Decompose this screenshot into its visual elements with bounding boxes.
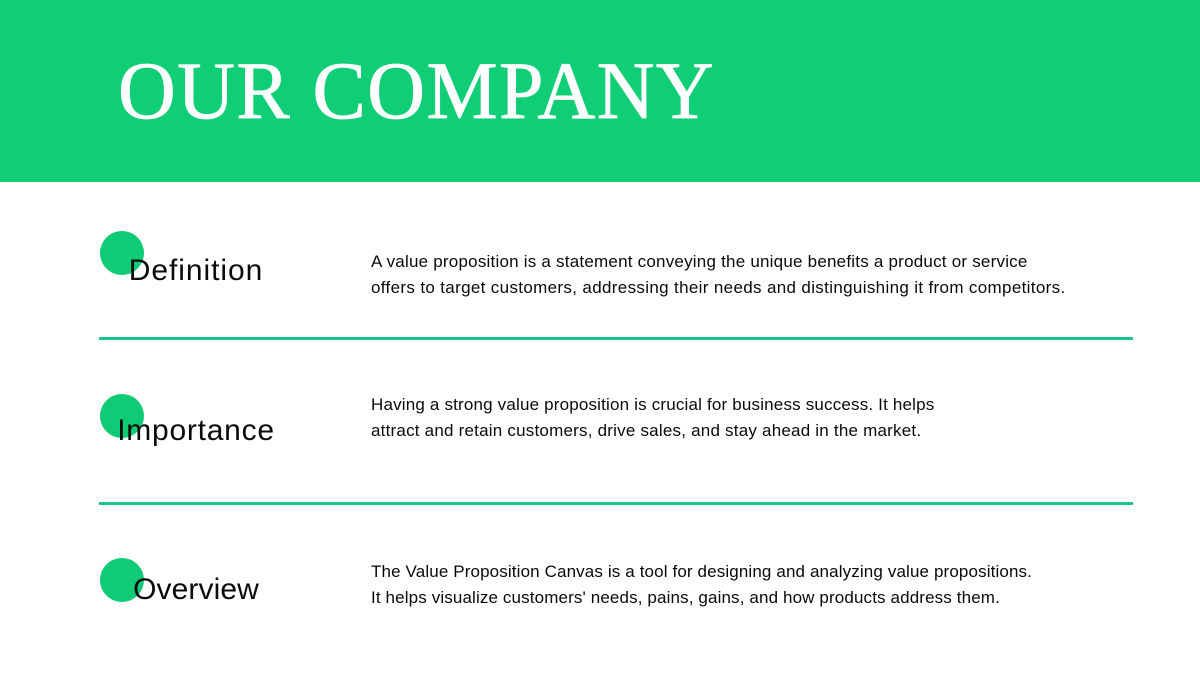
- icon: importance dot: [100, 394, 144, 438]
- text block: definition: A value proposition is a statement conveying the unique benefits a product or service: [371, 252, 1028, 271]
- title: OUR COMPANY: [118, 47, 715, 136]
- text block: definition: [371, 252, 1066, 297]
- text block: overview: It helps visualize customers' needs, pains, gains, and how products address them.: [371, 588, 1000, 607]
- text block: importance: [371, 395, 934, 440]
- text block: importance: attract and retain customers, drive sales, and stay ahead in the market.: [371, 421, 921, 440]
- heading: importance: Importance: [117, 414, 275, 447]
- text block: importance: Having a strong value proposition is crucial for business success. It helps: [371, 395, 934, 414]
- text block: definition: offers to target customers, addressing their needs and distinguishing it from competitors.: [371, 278, 1066, 297]
- heading: definition: Definition: [129, 254, 263, 287]
- heading: overview: Overview: [133, 573, 259, 606]
- icon: overview dot: [100, 558, 144, 602]
- header banner: [0, 0, 1200, 182]
- text block: overview: The Value Proposition Canvas is a tool for designing and analyzing value propositions.: [371, 562, 1032, 581]
- text block: overview: [371, 562, 1032, 607]
- icon: definition dot: [100, 231, 144, 275]
